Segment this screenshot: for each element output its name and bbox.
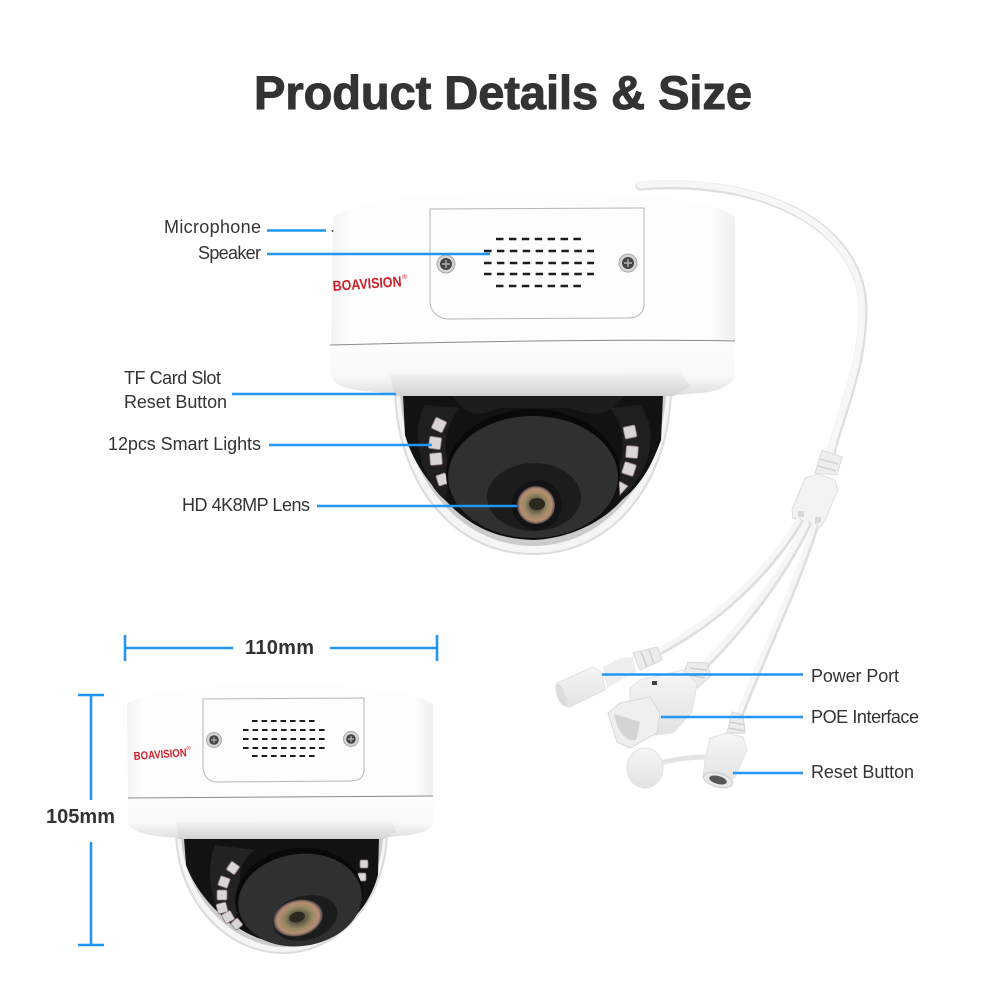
speaker grille: [243, 721, 326, 756]
callout label: Speaker: Speaker: [198, 243, 261, 263]
height dimension label: 105mm: [46, 806, 115, 828]
width dimension arrow: [125, 635, 437, 661]
brand logo: BOAVISION: [332, 274, 402, 295]
right screw: [344, 732, 358, 746]
infrared smart lights: [216, 860, 368, 930]
camera dome: [175, 830, 388, 954]
callout label: TF card slot and reset button: TF Card Slot: [124, 368, 221, 388]
camera dome: [394, 385, 672, 555]
cover plate: [430, 208, 644, 319]
callout label: TF card slot and reset button: Reset Button: [124, 392, 227, 412]
POE interface connector: [608, 662, 711, 748]
right screw: [619, 254, 637, 272]
cable Y connector: [792, 450, 842, 527]
left screw: [206, 732, 222, 748]
black lens disc: [229, 840, 369, 954]
brand logo: BOAVISION: [133, 747, 187, 763]
callout label: 12pcs Smart Lights: 12pcs Smart Lights: [108, 434, 261, 454]
callout label: Reset Button: Reset Button: [811, 762, 914, 782]
callout label: HD lens: HD 4K8MP Lens: [182, 495, 310, 515]
housing upper body: [127, 685, 433, 798]
speaker grille: [484, 239, 594, 286]
cover plate: [203, 698, 364, 782]
microphone hole: [332, 230, 334, 232]
dust cap: [627, 748, 705, 788]
callout label: TF card slot and reset button: [124, 368, 227, 412]
callout lines: [232, 230, 803, 773]
callout label: Power Port: Power Port: [811, 666, 899, 686]
width dimension label: 110mm: [245, 637, 314, 659]
infrared smart lights: [428, 417, 639, 495]
main camera cable: [640, 184, 863, 454]
height dimension arrow: [78, 695, 104, 945]
brand logo: ®: [402, 273, 408, 281]
black lens disc: [446, 409, 620, 539]
HD lens: [512, 480, 562, 530]
branch cables: [657, 521, 815, 715]
main camera: [330, 192, 735, 555]
power port plug: [553, 647, 662, 708]
housing lower band: [330, 340, 735, 396]
title: Product Details & Size: [254, 66, 752, 119]
housing lower band: [128, 796, 433, 839]
callout label: Microphone: Microphone: [164, 217, 261, 237]
lens: [269, 894, 327, 942]
left screw: [437, 255, 455, 273]
secondary camera: [127, 685, 433, 954]
housing upper body: [331, 192, 735, 345]
reset button connector: [702, 712, 747, 791]
callout label: POE Interface: POE Interface: [811, 707, 919, 727]
brand logo: ®: [186, 745, 192, 752]
